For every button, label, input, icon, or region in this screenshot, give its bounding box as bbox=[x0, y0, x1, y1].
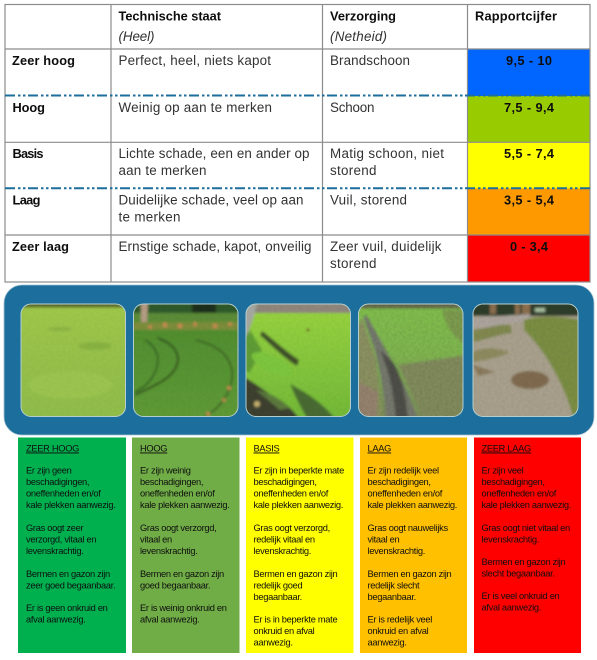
card: zeer laag: beschadigingen, bbox=[482, 477, 545, 487]
row: hoog: Hoog bbox=[12, 100, 45, 115]
card: zeer hoog: afval aanwezig. bbox=[26, 614, 86, 624]
card: hoog: Er is weinig onkruid en bbox=[140, 603, 227, 613]
card: laag: redelijk slecht bbox=[368, 580, 420, 590]
card: laag: oneffenheden en/of bbox=[368, 488, 443, 498]
photo: zeer hoog bbox=[20, 304, 126, 417]
row: basis bbox=[12, 146, 555, 178]
card: basis: Bermen en gazon zijn bbox=[254, 569, 338, 579]
row: laag: Duidelijke schade, veel op aan bbox=[118, 192, 304, 208]
card: hoog: oneffenheden en/of bbox=[140, 488, 215, 498]
card: hoog: Bermen en gazon zijn bbox=[140, 569, 224, 579]
card: laag: begaanbaar. bbox=[368, 592, 416, 602]
card: laag bbox=[360, 438, 467, 653]
card: basis bbox=[246, 438, 354, 653]
card: zeer laag: Gras oogt niet vitaal en bbox=[482, 523, 570, 533]
row: laag: te merken bbox=[118, 210, 180, 224]
row: basis: Matig schoon, niet bbox=[330, 146, 444, 161]
row: zeer hoog: Brandschoon bbox=[330, 53, 410, 68]
card: zeer laag: Er is veel onkruid en bbox=[482, 591, 560, 601]
row: laag: Vuil, storend bbox=[330, 192, 407, 208]
row: zeer laag: Zeer vuil, duidelijk bbox=[330, 239, 442, 254]
card: laag: Er zijn redelijk veel bbox=[368, 466, 439, 476]
panel: foto's bbox=[4, 285, 594, 435]
score cell colours bbox=[468, 49, 590, 282]
row: zeer laag: Zeer laag bbox=[12, 239, 69, 254]
card: basis: kale plekken aanwezig. bbox=[254, 500, 343, 510]
row: laag bbox=[12, 192, 555, 224]
card: zeer hoog: oneffenheden en/of bbox=[26, 488, 101, 498]
row: zeer hoog: Zeer hoog bbox=[12, 53, 75, 68]
card: zeer hoog bbox=[18, 438, 126, 653]
table header: (Heel) bbox=[118, 29, 154, 44]
card: zeer laag: ZEER LAAG bbox=[482, 444, 531, 454]
card: hoog: vitaal en bbox=[140, 534, 172, 544]
card: laag: LAAG bbox=[368, 444, 391, 454]
row: zeer hoog bbox=[12, 53, 552, 68]
row: zeer laag: Ernstige schade, kapot, onveilig bbox=[118, 239, 312, 254]
card: laag: vitaal en bbox=[368, 534, 400, 544]
card: laag: Gras oogt nauwelijks bbox=[368, 523, 448, 533]
card: hoog: goed begaanbaar. bbox=[140, 580, 210, 590]
card: hoog: HOOG bbox=[140, 444, 167, 454]
card: zeer laag: Bermen en gazon zijn bbox=[482, 557, 566, 567]
row: laag: 3,5 - 5,4 bbox=[504, 192, 555, 208]
card: hoog: Er zijn weinig bbox=[140, 466, 191, 476]
row: zeer laag: 0 - 3,4 bbox=[510, 239, 549, 254]
table: kwaliteitsniveaus bbox=[5, 4, 590, 282]
card: basis: oneffenheden en/of bbox=[254, 488, 329, 498]
row: zeer laag bbox=[12, 239, 549, 271]
card: zeer laag: oneffenheden en/of bbox=[482, 488, 557, 498]
table header: (Netheid) bbox=[330, 29, 387, 44]
row: zeer hoog: 9,5 - 10 bbox=[506, 53, 552, 68]
row: hoog: Weinig op aan te merken bbox=[118, 100, 272, 115]
row: hoog bbox=[12, 100, 555, 115]
card: hoog: levenskrachtig. bbox=[140, 546, 198, 556]
card: hoog: afval aanwezig. bbox=[140, 614, 200, 624]
card: basis: redelijk vitaal en bbox=[254, 534, 315, 544]
row: zeer laag: storend bbox=[330, 256, 376, 271]
table header: Technische staat bbox=[118, 8, 222, 24]
card: laag: levenskrachtig. bbox=[368, 546, 425, 556]
card: basis: Er is in beperkte mate bbox=[254, 614, 337, 624]
photo: zeer laag bbox=[472, 304, 578, 417]
photo: basis bbox=[246, 304, 351, 417]
card: laag: Bermen en gazon zijn bbox=[368, 569, 452, 579]
card: zeer laag bbox=[474, 438, 581, 653]
card: zeer hoog: Gras oogt zeer bbox=[26, 523, 83, 533]
table header: Rapportcijfer bbox=[475, 8, 557, 24]
row: basis: Basis bbox=[12, 146, 44, 161]
photo: laag bbox=[358, 304, 464, 417]
card: basis: levenskrachtig. bbox=[254, 546, 311, 556]
table header: Verzorging bbox=[330, 8, 396, 24]
card: laag: onkruid en afval bbox=[368, 626, 429, 636]
card: zeer hoog: kale plekken aanwezig. bbox=[26, 500, 116, 510]
card: zeer hoog: levenskrachtig. bbox=[26, 546, 84, 556]
card: laag: Er is redelijk veel bbox=[368, 614, 432, 624]
card: zeer laag: afval aanwezig. bbox=[482, 602, 541, 612]
card: hoog bbox=[132, 438, 240, 653]
row: hoog: Schoon bbox=[330, 100, 374, 115]
card: zeer hoog: Er zijn geen bbox=[26, 466, 72, 476]
card: basis: Gras oogt verzorgd, bbox=[254, 523, 330, 533]
card: laag: kale plekken aanwezig. bbox=[368, 500, 457, 510]
card: zeer hoog: ZEER HOOG bbox=[26, 444, 79, 454]
table header bbox=[118, 8, 557, 44]
card: hoog: kale plekken aanwezig. bbox=[140, 500, 230, 510]
row: basis: storend bbox=[330, 163, 376, 178]
row: basis: 5,5 - 7,4 bbox=[504, 146, 555, 161]
card: zeer hoog: verzorgd, vitaal en bbox=[26, 534, 96, 544]
card: basis: onkruid en afval bbox=[254, 626, 315, 636]
card: basis: BASIS bbox=[254, 444, 279, 454]
card: laag: aanwezig. bbox=[368, 638, 407, 648]
card: zeer laag: kale plekken aanwezig. bbox=[482, 500, 571, 510]
card: zeer hoog: zeer goed begaanbaar. bbox=[26, 580, 115, 590]
row: laag: Laag bbox=[12, 192, 40, 208]
card: zeer laag: Er zijn veel bbox=[482, 466, 524, 476]
card: zeer hoog: Bermen en gazon zijn bbox=[26, 569, 110, 579]
card: hoog: beschadigingen, bbox=[140, 477, 203, 487]
row: hoog: 7,5 - 9,4 bbox=[504, 100, 555, 115]
card: basis: aanwezig. bbox=[254, 638, 293, 648]
card: hoog: Gras oogt verzorgd, bbox=[140, 523, 216, 533]
card: zeer laag: levenskrachtig. bbox=[482, 534, 539, 544]
row: basis: aan te merken bbox=[118, 163, 206, 178]
card: basis: Er zijn in beperkte mate bbox=[254, 466, 344, 476]
row: zeer hoog: Perfect, heel, niets kapot bbox=[118, 53, 271, 68]
photo: hoog bbox=[133, 304, 238, 417]
card: laag: beschadigingen, bbox=[368, 477, 431, 487]
row: basis: Lichte schade, een en ander op bbox=[118, 146, 310, 161]
card: zeer hoog: Er is geen onkruid en bbox=[26, 603, 108, 613]
card: basis: redelijk goed bbox=[254, 580, 302, 590]
card: basis: beschadigingen, bbox=[254, 477, 317, 487]
card: basis: begaanbaar. bbox=[254, 592, 302, 602]
card: zeer laag: slecht begaanbaar. bbox=[482, 568, 555, 578]
card: zeer hoog: beschadigingen, bbox=[26, 477, 89, 487]
